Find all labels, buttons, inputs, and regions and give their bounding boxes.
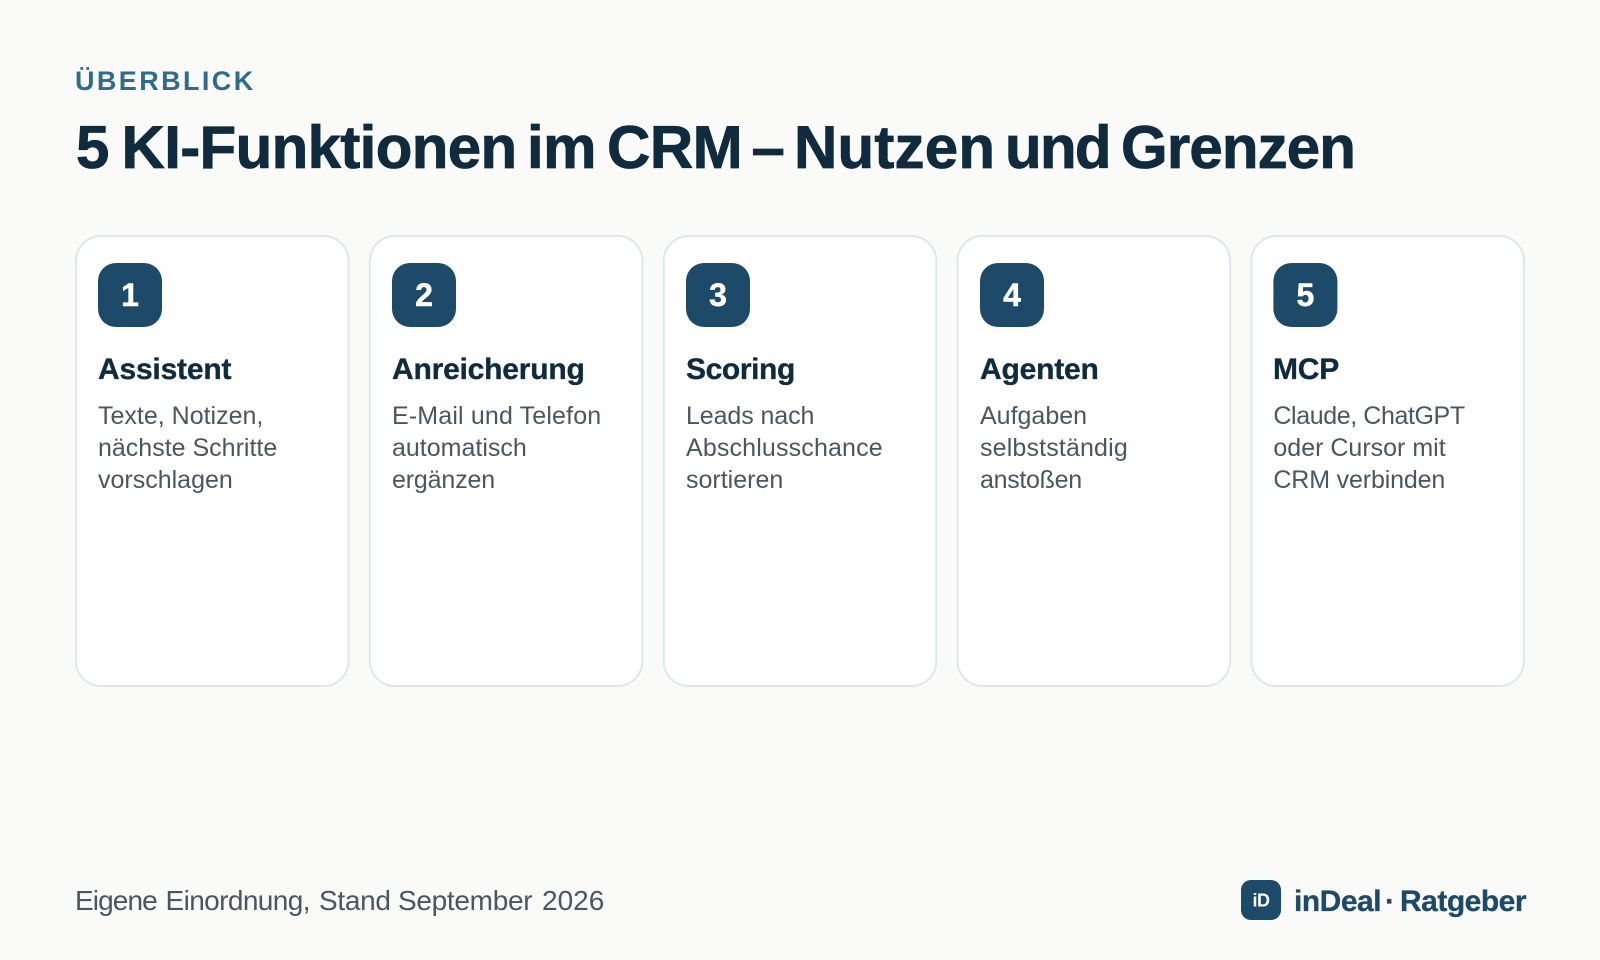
badge 3: 3 — [709, 277, 727, 313]
description: Scoring: Leads nach — [686, 402, 814, 430]
heading: Scoring: Scoring — [686, 353, 795, 386]
description: MCP: Claude, ChatGPT — [1273, 402, 1465, 430]
heading: Assistent: Assistent — [98, 353, 231, 386]
title: Grenzen — [1121, 114, 1355, 181]
description: Anreicherung: E-Mail und Telefon — [392, 402, 601, 430]
icon: iD logo — [1241, 880, 1281, 920]
heading: Anreicherung: Anreicherung — [392, 353, 585, 386]
title: und — [1005, 114, 1110, 181]
panel: Scoring — [664, 236, 936, 686]
badge 4: 4 — [1003, 277, 1021, 313]
source note: Einordnung, — [166, 885, 310, 916]
title: Nutzen — [794, 114, 995, 181]
badge 5 — [1273, 263, 1337, 327]
badge 5: 5 — [1297, 277, 1314, 313]
badge 1: 1 — [121, 277, 139, 313]
heading: MCP: MCP — [1273, 353, 1339, 386]
source note: Eigene — [75, 885, 157, 916]
eyebrow: ÜBERBLICK — [75, 66, 256, 96]
title: im — [527, 114, 596, 181]
badge 2 — [392, 263, 456, 327]
description: Assistent: nächste Schritte — [98, 434, 277, 462]
description: MCP: CRM verbinden — [1273, 466, 1445, 494]
panel: Assistent — [76, 236, 349, 686]
badge 3 — [686, 263, 750, 327]
description: Assistent: vorschlagen — [98, 466, 233, 494]
badge 1 — [98, 263, 162, 327]
brand name: · — [1385, 885, 1395, 918]
description: Agenten: anstoßen — [980, 466, 1082, 494]
description: MCP: oder Cursor mit — [1273, 434, 1446, 462]
heading: Agenten: Agenten — [980, 353, 1099, 386]
description: Agenten: Aufgaben — [980, 402, 1087, 430]
brand name: inDeal — [1294, 885, 1381, 918]
badge 4 — [980, 263, 1044, 327]
description: Anreicherung: automatisch — [392, 434, 527, 462]
source note: Stand — [319, 885, 391, 916]
description: Scoring: sortieren — [686, 466, 783, 494]
description: Scoring: Abschlusschance — [686, 434, 883, 462]
title: – — [752, 114, 785, 181]
panel: Agenten — [958, 236, 1230, 686]
icon: iD logo: iD — [1252, 890, 1270, 910]
title: 5 — [76, 114, 109, 181]
title: CRM — [607, 114, 742, 181]
description: Assistent: Texte, Notizen, — [98, 402, 263, 430]
badge 2: 2 — [415, 277, 433, 313]
title: KI-Funktionen — [122, 114, 516, 181]
description: Anreicherung: ergänzen — [392, 466, 495, 494]
description: Agenten: selbstständig — [980, 434, 1128, 462]
source note: September — [398, 885, 532, 916]
panel: MCP — [1251, 236, 1524, 686]
source note: 2026 — [542, 885, 604, 916]
panel: Anreicherung — [370, 236, 642, 686]
brand logo — [1241, 880, 1527, 920]
brand name: Ratgeber — [1400, 885, 1527, 918]
